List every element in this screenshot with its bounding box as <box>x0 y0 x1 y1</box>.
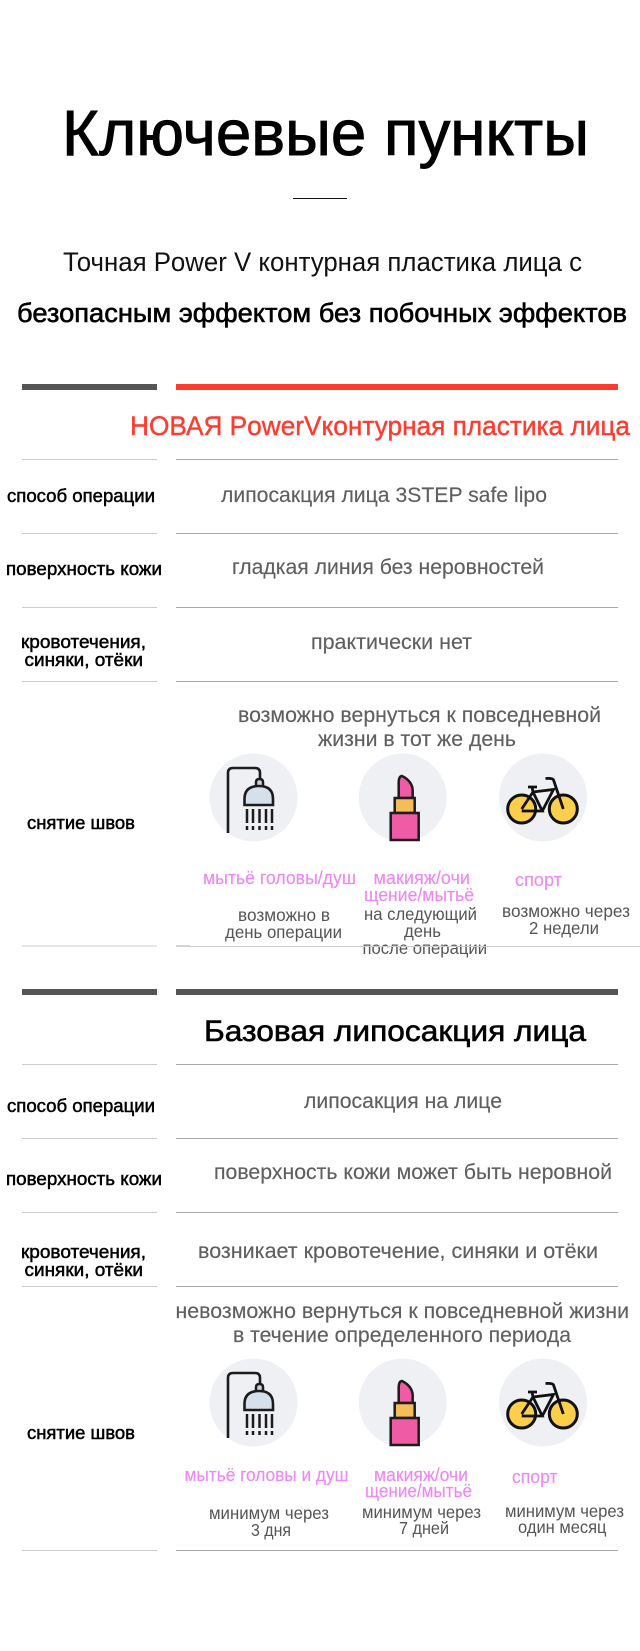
row value: bleeding: возникает кровотечение, синяки и отёки <box>198 1240 598 1263</box>
label: sport: спорт <box>515 870 562 890</box>
panel: basic facial liposuction <box>6 989 629 1551</box>
row label: skin surface: поверхность кожи <box>6 558 162 579</box>
row label: bleeding, bruising, swelling <box>21 1241 146 1280</box>
note: shower timing: возможно в <box>238 905 330 925</box>
label: sport: спорт <box>512 1467 558 1487</box>
note: shower timing: день операции <box>225 922 342 942</box>
panel heading: new PowerV: НОВАЯ PowerVконтурная пластика лица <box>130 411 631 441</box>
label: wash hair/shower: мытьё головы/душ <box>203 868 356 888</box>
row label: bleeding, bruising, swelling: кровотечения, <box>21 631 146 652</box>
row value: operation method: липосакция на лице <box>304 1090 502 1113</box>
note: shower timing <box>209 1503 329 1540</box>
note: makeup timing: день <box>404 921 441 941</box>
note: shower timing: 3 дня <box>251 1520 291 1540</box>
panel heading: basic liposuction: Базовая липосакция лица <box>204 1015 586 1048</box>
icon: lipstick <box>359 1358 447 1446</box>
row label: bleeding, bruising, swelling <box>21 631 146 670</box>
icon: lipstick <box>359 754 447 842</box>
note: sport timing: 2 недели <box>529 918 599 938</box>
label: wash hair and shower: мытьё головы и душ <box>184 1465 348 1485</box>
row label: operation method: способ операции <box>7 1095 155 1116</box>
icon: shower <box>210 1358 298 1446</box>
note: makeup timing: после операции <box>362 938 487 958</box>
icon: bicycle <box>499 1358 587 1446</box>
note: shower timing: минимум через <box>209 1503 329 1523</box>
label: makeup/cleansing <box>364 868 474 905</box>
title: Ключевые пункты <box>62 97 589 169</box>
row value: skin surface: гладкая линия без неровностей <box>232 556 544 579</box>
note: makeup timing <box>362 1502 481 1538</box>
row value: operation method: липосакция лица 3STEP safe lipo <box>221 484 547 507</box>
note: sport timing <box>502 901 630 938</box>
icon: bicycle <box>499 754 587 842</box>
note: makeup timing: минимум через <box>362 1502 481 1522</box>
row value: recovery statement: жизни в тот же день <box>318 728 516 751</box>
note: makeup timing <box>362 904 487 958</box>
row label: bleeding, bruising, swelling: синяки, отёки <box>24 649 143 670</box>
row value: recovery statement <box>238 704 601 751</box>
subtitle line 2: безопасным эффектом без побочных эффектов <box>17 298 627 328</box>
row value: bleeding: практически нет <box>311 631 472 654</box>
row label: bleeding, bruising, swelling: синяки, отёки <box>24 1259 143 1280</box>
label: makeup/cleansing <box>365 1465 472 1501</box>
row value: recovery statement: невозможно вернуться к повседневной жизни <box>176 1300 629 1323</box>
note: makeup timing: на следующий <box>364 904 477 924</box>
row value: skin surface: поверхность кожи может быть неровной <box>214 1161 612 1184</box>
row label: skin surface: поверхность кожи <box>6 1168 162 1189</box>
note: shower timing <box>225 905 342 942</box>
panel: new PowerV facial contouring <box>6 384 640 958</box>
row value: recovery statement: в течение определенного периода <box>233 1324 571 1347</box>
row label: bleeding, bruising, swelling: кровотечения, <box>21 1241 146 1262</box>
row value: recovery statement: возможно вернуться к повседневной <box>238 704 601 727</box>
note: sport timing <box>505 1501 624 1537</box>
label: makeup/cleansing: щение/мытьё <box>365 1481 472 1501</box>
subtitle line 1: Точная Power V контурная пластика лица с <box>63 247 582 277</box>
row label: suture removal: снятие швов <box>27 812 135 833</box>
icon: shower <box>210 754 298 842</box>
note: sport timing: один месяц <box>518 1517 606 1537</box>
note: sport timing: возможно через <box>502 901 630 921</box>
row label: suture removal: снятие швов <box>27 1422 135 1443</box>
header block <box>17 97 627 328</box>
note: makeup timing: 7 дней <box>399 1518 449 1538</box>
row label: operation method: способ операции <box>7 485 155 506</box>
label: makeup/cleansing: макияж/очи <box>374 868 470 888</box>
row value: recovery statement <box>176 1300 629 1347</box>
label: makeup/cleansing: щение/мытьё <box>364 885 474 905</box>
label: makeup/cleansing: макияж/очи <box>374 1465 468 1485</box>
note: sport timing: минимум через <box>505 1501 624 1521</box>
